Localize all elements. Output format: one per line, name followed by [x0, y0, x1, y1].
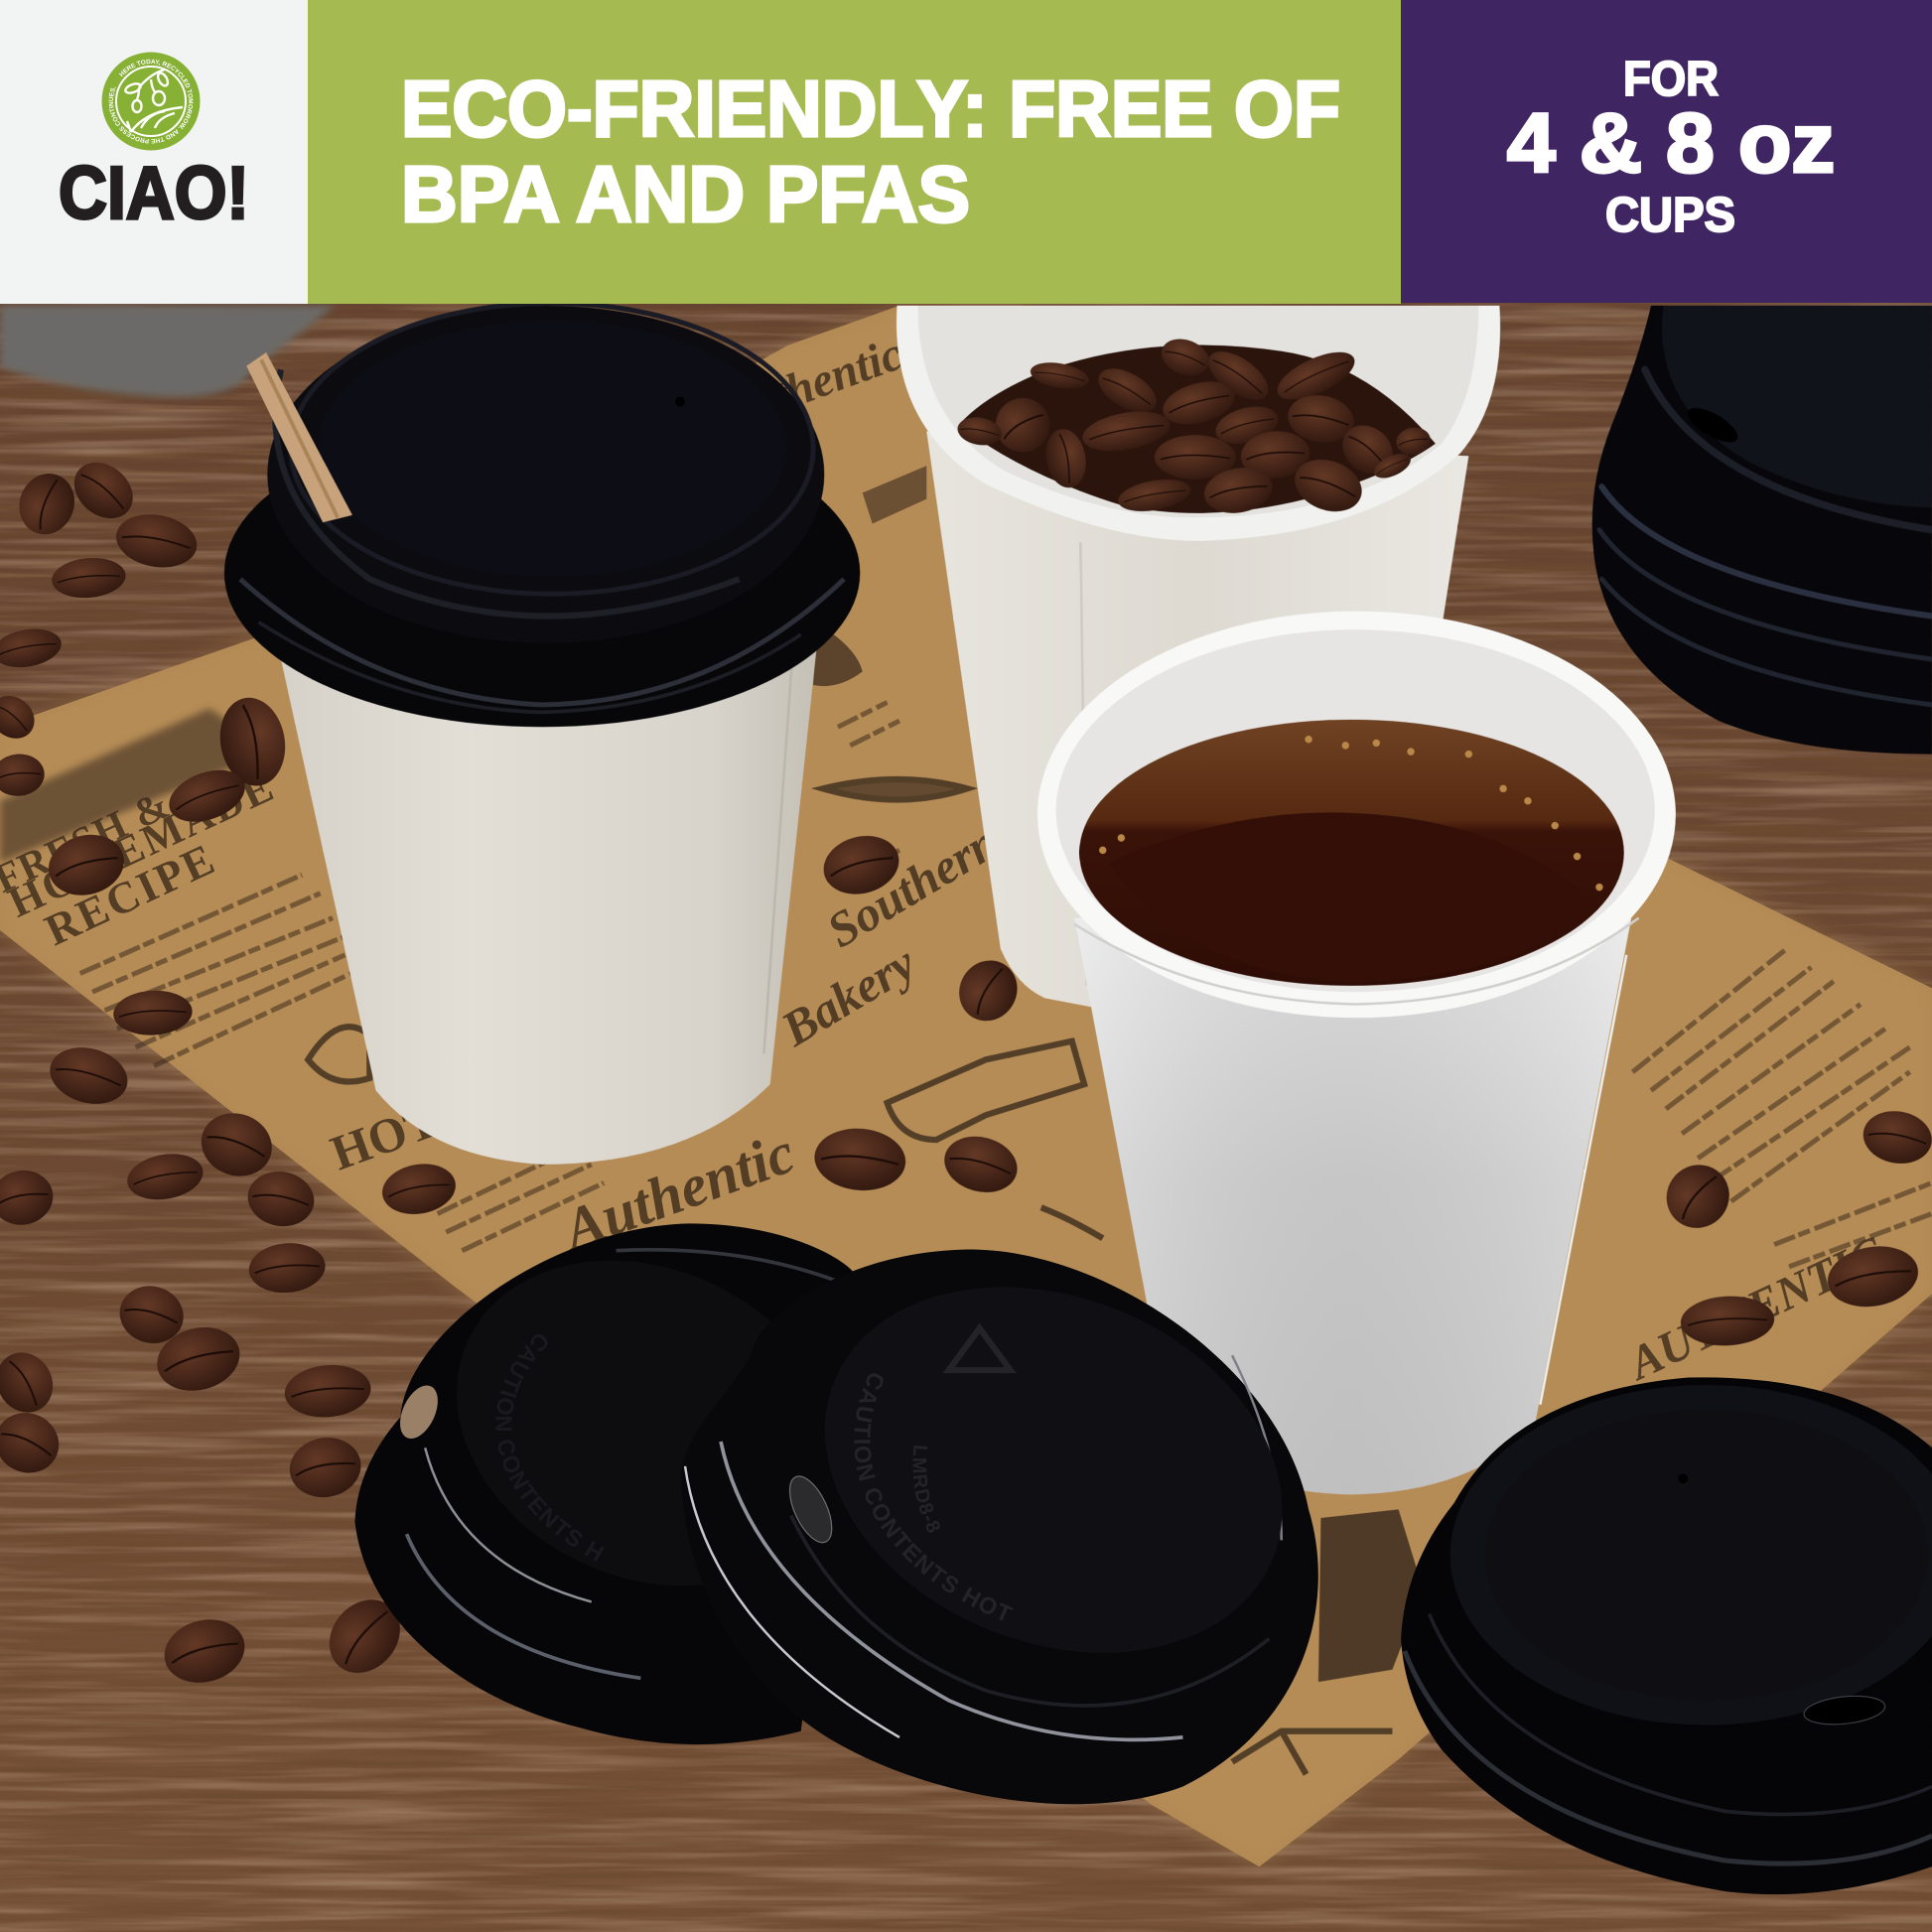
back cup filled with coffee beans — [897, 306, 1500, 1011]
lid flat top — [318, 321, 786, 577]
header band — [0, 0, 1932, 304]
cup body — [281, 622, 819, 1165]
badge slogan: HERE TODAY, RECYCLED TOMORROW. AND THE PROCESS CONTINUES. — [109, 60, 193, 143]
lid highlights — [685, 1466, 899, 1737]
panel: headline background — [308, 0, 1401, 304]
newspaper printed headings — [0, 328, 1891, 1391]
sip hole — [781, 1470, 840, 1549]
cup sizes callout: 4 & 8 oz — [1507, 96, 1835, 190]
sip hole — [392, 1380, 446, 1445]
lid inner face — [769, 1221, 1337, 1719]
newspaper printed headings: HOT — [324, 1092, 446, 1180]
front cup with black coffee — [1037, 612, 1676, 1494]
lid dome — [267, 306, 824, 643]
metal tray, top left — [0, 306, 336, 397]
embossed lid text: CAUTION CONTENTS HOT — [854, 1373, 1013, 1620]
lid inner face — [403, 1200, 891, 1646]
headline: ECO-FRIENDLY: FREE OF — [401, 65, 1340, 153]
sip hole — [1683, 401, 1742, 449]
cup sizes callout: FOR — [1623, 53, 1719, 106]
embossed model number: LMRD8-8 — [913, 1446, 940, 1533]
newspaper printed headings: RECIPE — [38, 833, 223, 955]
newspaper printed headings: Authentic — [710, 328, 909, 443]
lid face — [1450, 1385, 1932, 1725]
coffee beans scattered on the table — [0, 451, 1932, 1692]
lid brim — [224, 419, 860, 727]
badge olive branch — [124, 69, 183, 132]
coffee bubbles — [1099, 736, 1603, 891]
lid highlights — [1405, 1651, 1932, 1863]
newspaper illustrations — [308, 779, 1392, 1774]
newspaper small columns of text — [80, 702, 1932, 1267]
headline: BPA AND PFAS — [401, 150, 970, 238]
wooden stirrer — [246, 352, 352, 522]
panel: logo background — [0, 0, 308, 304]
beans inside the cup — [955, 333, 1436, 520]
loose lid, left — [0, 471, 931, 1781]
cup rim — [1037, 612, 1676, 1018]
cup body — [1074, 918, 1631, 1494]
cup inside — [1056, 629, 1655, 992]
newspaper printed headings: AUTHENTIC — [1619, 1227, 1891, 1391]
logo badge — [101, 52, 201, 151]
newspaper printed headings: HOMEMADE — [1, 762, 282, 927]
embossed lid text: CAUTION CONTENTS HOT — [359, 1227, 646, 1600]
headline — [401, 65, 1340, 238]
top-right stack of lids — [1592, 306, 1932, 755]
cup sizes callout — [1507, 53, 1835, 242]
lid highlights — [407, 1534, 640, 1678]
newspaper printed headings: Bakery — [771, 934, 925, 1057]
newspaper printed headings: Southern — [818, 814, 1008, 958]
loose lid, centre — [683, 1249, 1318, 1805]
panel: cup sizes background — [1401, 0, 1932, 303]
newspaper printed headings: Authentic — [551, 1119, 803, 1264]
stack highlights — [1599, 369, 1932, 705]
recycling mark — [949, 1328, 1011, 1370]
logo wordmark: CIAO! — [59, 151, 249, 234]
lid top — [1662, 306, 1932, 507]
newspaper masthead band — [0, 709, 271, 863]
cup sizes callout: CUPS — [1605, 189, 1735, 242]
loose lid, bottom right — [1401, 1377, 1932, 1894]
left cup with black lid and stirrer — [224, 303, 860, 1165]
coffee surface — [1079, 720, 1624, 986]
cup rim — [897, 306, 1500, 541]
sip hole — [1803, 1693, 1886, 1727]
cup body — [926, 431, 1468, 1011]
sip dot — [675, 397, 685, 407]
